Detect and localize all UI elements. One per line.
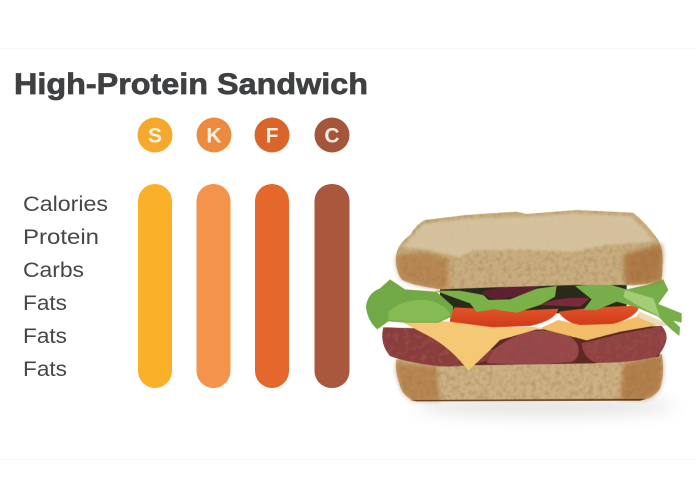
- bottom crust line: [410, 399, 647, 401]
- row labels: [23, 193, 108, 381]
- meat patties: [382, 326, 667, 366]
- column badges: [138, 118, 350, 152]
- badge F: F: [266, 124, 279, 148]
- badge S: S: [148, 124, 162, 148]
- badge K: K: [206, 124, 222, 148]
- red onion: [482, 286, 590, 307]
- label fats: Fats: [23, 325, 67, 348]
- bar C: [314, 184, 350, 388]
- bars: [138, 184, 350, 388]
- title: High-Protein Sandwich: [14, 68, 368, 101]
- right leaves: [575, 279, 682, 336]
- left leaf: [366, 279, 453, 329]
- badge K: [196, 118, 232, 152]
- left patty: [382, 327, 507, 366]
- right crust: [623, 243, 663, 284]
- badge S: [138, 118, 172, 152]
- middle leaf: [435, 286, 557, 313]
- tomato slices: [450, 305, 639, 327]
- top crust surface: [403, 213, 654, 257]
- label fats: Fats: [23, 358, 67, 381]
- middle patty: [487, 330, 579, 364]
- badge C: [314, 118, 350, 152]
- bar F: [255, 184, 289, 388]
- left crust: [396, 252, 448, 289]
- label carbs: Carbs: [23, 259, 84, 282]
- badge F: [254, 118, 290, 152]
- dark filling backing: [440, 282, 627, 313]
- cheese: [403, 312, 677, 371]
- label protein: Protein: [23, 226, 99, 249]
- sandwich shadow: [415, 396, 675, 416]
- label fats: Fats: [23, 292, 67, 315]
- top bread: [396, 210, 663, 289]
- lettuce: [366, 279, 682, 336]
- bottom rule: [0, 459, 696, 460]
- sandwich illustration: [366, 210, 682, 401]
- badge C: C: [324, 124, 340, 148]
- top rule: [0, 48, 696, 49]
- right patty: [582, 326, 667, 363]
- label calories: Calories: [23, 193, 108, 216]
- meat backing: [383, 326, 666, 365]
- bar K: [196, 184, 230, 388]
- bottom bread: [396, 354, 663, 401]
- bar S: [138, 184, 172, 388]
